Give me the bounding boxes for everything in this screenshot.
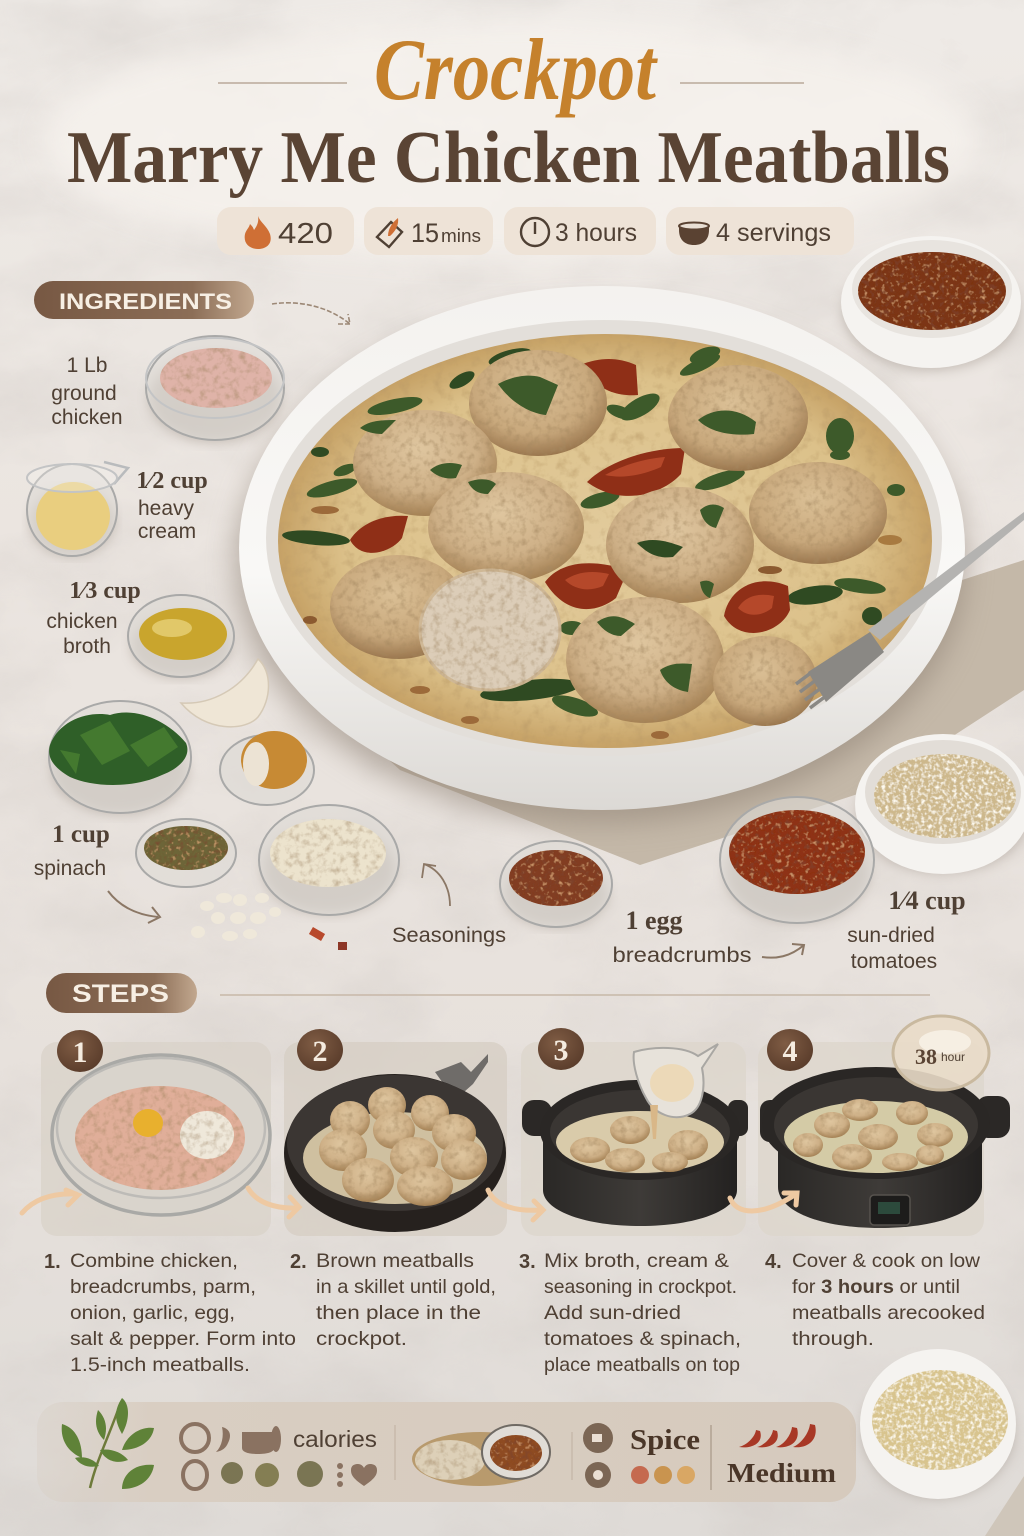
slow cooker xyxy=(976,1096,1010,1138)
spice level: Medium xyxy=(727,1458,837,1488)
bowl: breadcrumbs, right xyxy=(855,734,1024,874)
ingredient: heavy cream: heavy xyxy=(138,497,195,520)
icon: clock xyxy=(521,218,549,246)
ingredient: chicken broth: 1⁄3 cup xyxy=(69,578,141,604)
step 1 text: breadcrumbs, parm, xyxy=(70,1276,256,1298)
step 1 text: 1. xyxy=(44,1251,61,1273)
ingredient: sun-dried tomatoes bowl xyxy=(720,797,874,923)
stat pills: 3 hours xyxy=(555,219,637,247)
step 2 text: then place in the xyxy=(316,1302,481,1324)
stat pills: 15 xyxy=(411,218,439,248)
step 3 text: 3. xyxy=(519,1251,536,1273)
step 4 text: 4. xyxy=(765,1251,782,1273)
ingredient: heavy cream: 1⁄2 cup xyxy=(136,468,208,494)
glass lid timer: hour xyxy=(941,1050,965,1064)
pouring jug xyxy=(634,1044,718,1117)
arrow: ingredients to dish xyxy=(272,303,350,324)
step 3 text: Add sun-dried xyxy=(544,1302,681,1324)
ingredient: ground chicken: ground xyxy=(51,382,117,405)
stat pills: 420 xyxy=(278,218,333,250)
step 1 text: salt & pepper. Form into xyxy=(70,1328,296,1350)
stat pills: 4 servings xyxy=(716,219,831,247)
number 4 xyxy=(767,1029,813,1071)
icon: prep time xyxy=(377,222,402,247)
label: egg and breadcrumbs xyxy=(612,906,804,967)
label: egg and breadcrumbs: 1 egg xyxy=(625,906,683,935)
number 1 xyxy=(57,1030,103,1072)
fork xyxy=(796,512,1024,708)
ingredient: chicken broth xyxy=(46,578,234,678)
step 2 text: crockpot. xyxy=(316,1328,407,1350)
ingredient: heavy cream: cream xyxy=(138,520,196,543)
ingredient: garlic clove xyxy=(181,659,268,727)
icon: chili peppers xyxy=(739,1424,816,1447)
mixing bowl xyxy=(52,1055,270,1215)
ingredient: egg bowl xyxy=(220,731,314,805)
label: sun-dried tomatoes: tomatoes xyxy=(851,950,937,973)
heading: ingredients xyxy=(34,281,254,319)
stat pills: mins xyxy=(441,226,481,246)
number 4: 4 xyxy=(782,1035,798,1068)
title main line: Marry Me Chicken Meatballs xyxy=(67,117,950,199)
step 2 text: 2. xyxy=(290,1251,307,1273)
label: sun-dried tomatoes xyxy=(847,886,966,973)
step 4 panel xyxy=(758,1016,1010,1236)
number 1: 1 xyxy=(72,1036,88,1069)
step 2 text: Brown meatballs xyxy=(316,1250,474,1272)
linen cloth under plate xyxy=(290,560,1024,865)
label: sun-dried tomatoes: sun-dried xyxy=(847,924,935,947)
heading: ingredients: INGREDIENTS xyxy=(59,289,232,314)
arrows between steps xyxy=(22,1188,797,1220)
ingredient: dried herbs bowl xyxy=(136,819,236,887)
icon: flame xyxy=(245,216,271,249)
step 4 text: through. xyxy=(792,1328,874,1350)
step 2 text xyxy=(290,1250,496,1350)
step 2 text: in a skillet until gold, xyxy=(316,1276,496,1298)
number 3 xyxy=(538,1028,584,1070)
step 3 text: place meatballs on top xyxy=(544,1354,740,1376)
nutrition band xyxy=(37,1398,856,1502)
icon: serving bowl xyxy=(679,226,709,245)
heading: steps xyxy=(46,973,197,1013)
step 4 text: for 3 hours or until xyxy=(792,1276,960,1298)
ingredient: red flakes bowl xyxy=(500,841,612,927)
meatballs xyxy=(330,350,887,726)
ingredient: chicken broth: broth xyxy=(63,635,111,658)
spice level: Spice xyxy=(630,1425,700,1456)
title xyxy=(67,22,950,199)
skillet xyxy=(284,1074,506,1232)
step 1 text xyxy=(44,1250,296,1376)
step 3 text: seasoning in crockpot. xyxy=(544,1276,737,1298)
step 4 text xyxy=(765,1250,985,1350)
step 3 panel xyxy=(521,1028,748,1236)
ingredient: ground chicken: chicken xyxy=(51,406,123,429)
small leaves on meatballs xyxy=(360,376,756,692)
step 1 text: onion, garlic, egg, xyxy=(70,1302,235,1324)
spice level xyxy=(583,1423,837,1490)
plate shadow xyxy=(235,307,965,823)
crockpot xyxy=(522,1100,552,1136)
icons: calories row: calories xyxy=(293,1426,377,1452)
label: seasonings xyxy=(392,864,506,947)
title script line: Crockpot: Crockpot xyxy=(374,22,658,119)
number 3: 3 xyxy=(554,1034,568,1067)
step 4 text: meatballs arecooked xyxy=(792,1302,985,1324)
heading: steps: STEPS xyxy=(72,980,169,1008)
step 3 text xyxy=(519,1250,741,1376)
ingredient: heavy cream xyxy=(27,462,208,556)
main dish xyxy=(239,286,1024,810)
ingredient: ground chicken: 1 Lb xyxy=(67,354,107,377)
step 1 panel xyxy=(41,1030,271,1236)
ingredient: spinach bowl: spinach xyxy=(34,857,106,880)
arrow: spinach xyxy=(108,891,160,923)
white plate xyxy=(239,286,965,810)
stat pills xyxy=(217,207,854,255)
ingredient: spinach bowl xyxy=(34,701,191,880)
label: sun-dried tomatoes: 1⁄4 cup xyxy=(888,886,966,915)
icon: herb sprig xyxy=(62,1398,154,1489)
ingredient: ground chicken xyxy=(51,336,284,442)
ingredient: spinach bowl: 1 cup xyxy=(52,821,110,848)
bowl: red pepper flakes, top right xyxy=(841,236,1021,370)
step 3 text: tomatoes & spinach, xyxy=(544,1328,741,1350)
ingredient: chopped onion bowl xyxy=(259,805,399,915)
icon: tray with rice and flakes xyxy=(412,1425,550,1486)
number 2 xyxy=(297,1029,343,1071)
label: seasonings: Seasonings xyxy=(392,924,506,947)
step 2 panel xyxy=(284,1029,507,1236)
ingredient: chicken broth: chicken xyxy=(46,610,118,633)
timer display xyxy=(870,1195,910,1225)
step 1 text: Combine chicken, xyxy=(70,1250,238,1272)
spinach leaves in sauce xyxy=(282,343,905,739)
label: egg and breadcrumbs: breadcrumbs xyxy=(612,944,752,967)
creamy sauce xyxy=(278,334,932,748)
spatula xyxy=(435,1054,488,1100)
step 1 text: 1.5-inch meatballs. xyxy=(70,1354,250,1376)
scattered onion pieces xyxy=(191,893,347,950)
icons: calories row xyxy=(181,1424,377,1489)
step 4 text: Cover & cook on low xyxy=(792,1250,981,1272)
glass lid timer xyxy=(893,1016,989,1090)
sun-dried tomatoes xyxy=(350,359,790,633)
bowl: breadcrumbs, bottom right xyxy=(860,1349,1024,1536)
step 3 text: Mix broth, cream & xyxy=(544,1250,729,1272)
number 2: 2 xyxy=(312,1035,328,1068)
glass lid timer: 38 xyxy=(915,1044,937,1069)
